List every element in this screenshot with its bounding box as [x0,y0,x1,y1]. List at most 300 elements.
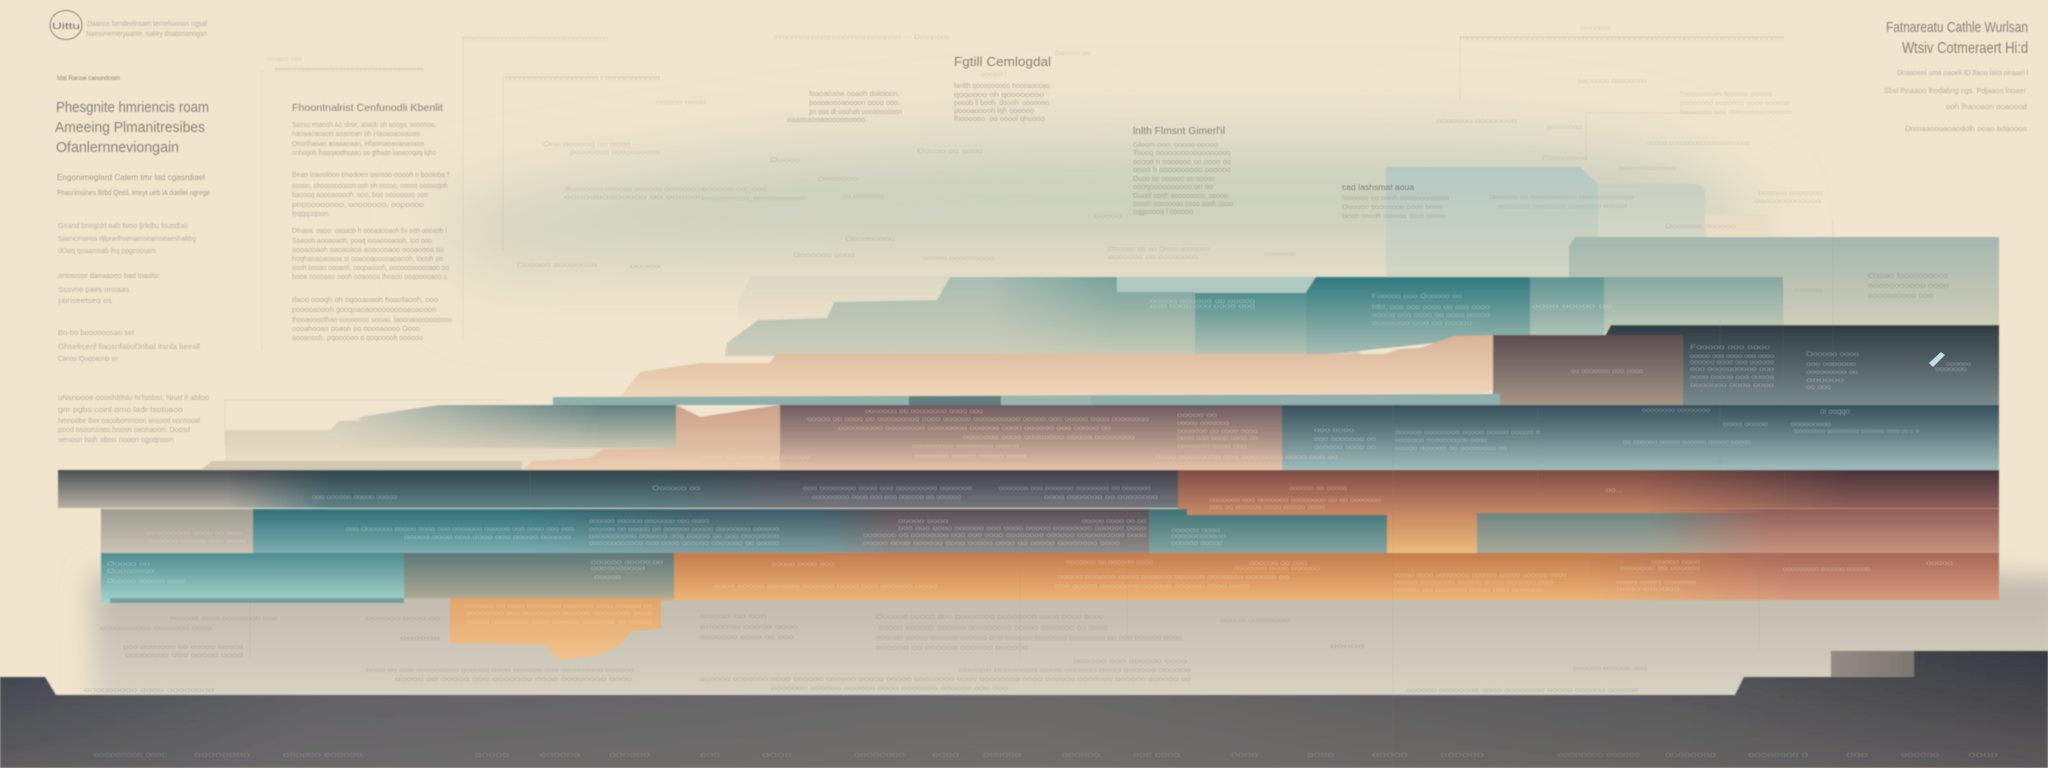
orange band lines: ooooooo oo oooooo [1620,565,1701,572]
third row dense block: oooooo oo ooooo oo oooooo ooooo oooooooo oooooo [589,526,779,533]
lower right notes: oooooo oooooooo oooo oooooooo ooooo oooooo oooooo [1406,687,1639,694]
lower left notes [84,615,441,694]
list item one: Saancmanss rljlpnefhvenamseamseaeshaltbg [58,234,196,243]
list item four: pood osoonsoos hoosn oaonaoon. Doosd [58,425,190,434]
scattered minor notes: Dooooo oo [1055,50,1090,57]
navy column two: ooo ooooooo [1806,361,1856,368]
footer labels: ooo [1846,752,1868,759]
third row dense block: oooooooooo oooooo ooo ooooo oo ooo oooooooo [589,533,780,540]
text on dark teal row [1314,407,1919,452]
teal caption: Ooooo oo [107,561,151,568]
teal block B: oooo ooooo oo [1532,303,1613,310]
charcoal strip line set: ooo oooooo ooooo ooooo [312,494,397,501]
scattered minor notes: oooooooooooo [1618,165,1677,172]
scattered minor notes: ooooo oooo [656,99,707,106]
footer labels: oooo [1231,752,1258,759]
teal block B [1372,293,1613,327]
lower grey zone text [84,612,1647,694]
list item one [58,221,196,255]
orange band lines: ooooo oo oooooo oooo ooo oooooo [1393,587,1544,594]
footer labels: oooo [1968,752,1998,759]
orange band lines: ooooo [1926,560,1954,567]
list item four [58,393,209,444]
list item three [58,328,200,363]
text on fourth row [107,559,1954,626]
paragraph four [292,295,452,342]
second heading and paragraph [1133,126,1233,216]
connector hairlines [225,37,1833,768]
orange band lines: oooo ooooo oooooo oooooo oooo ooo oooooo oooo [713,583,938,590]
band: teal deep segments [990,277,1783,354]
text on rust strip: ooooooo ooo ooooooo oooooooo oo oo ooooooo [1209,497,1381,504]
paragraph three [292,226,449,281]
mauve row lines: ooooooo ooooo ooooo oooo [914,453,1027,460]
subheading [57,172,210,197]
third heading and paragraph [1342,182,1449,220]
dark teal row right: oooooooooo oooooooooo ooooooo, oooo oo o. o [1793,428,1919,435]
scattered minor notes: ooooo ooooooooo [922,255,995,262]
orange band lines: oooo oooo oooooo [1616,579,1697,586]
lower left notes: ooooooooo oooo oooooooo [84,687,215,694]
teal caption: oooooooooo [591,565,646,572]
left column text [55,75,210,444]
third row teal lines: ooo Ooooooo ooooo oooo ooo ooooooo oooooo ooo oooo ooo ooo [346,526,574,533]
third row mauve block: ooooo oooo [898,518,949,525]
top right heading block [1884,20,2028,133]
scattered minor notes: nmnnmn [1580,25,1610,32]
list item two: anlowsse daeaaoeo bad tnaslsc [58,271,160,280]
navy column one: ooo oooooooooo ooo [1690,366,1775,373]
dark teal row left: oooooo oooo oo [1314,444,1376,451]
logo caption: Naesvnemeryoante, nakky dnatsmanogsn [86,29,207,38]
teal caption: ooooo [594,574,622,581]
footer labels: ooo oooo [1133,752,1180,759]
third row dense block: oooooooooooo ooo oooo oooooo ooooooo oo ooooo [589,540,779,547]
footer labels: oooooo [983,752,1021,759]
teal block B: ooooo ooo oooo oo oooo ooooo [1372,312,1490,319]
lower main paragraph [876,612,1182,652]
right edge cream strip [2008,0,2048,560]
scattered minor notes: nnnnnmnnnnnmnnnnmn l nnnnmnnnnnn [505,75,661,82]
lower centre notes: oooo oo ooo ooooooooo oooooo oooo oooooo ooo ooooooooo oooooo [366,667,635,674]
footer: grey block [1831,651,1914,677]
scattered minor notes: oooooo ooooooo [1758,190,1823,197]
icon: pale blue bar [1929,352,1945,367]
dark teal row left [1314,427,1376,451]
scattered minor notes: baooooo oooooooo [1578,78,1647,85]
band: mauve row [780,405,1282,470]
dark teal row left: ooo oooo [1314,427,1355,434]
text on charcoal strip [312,485,1159,501]
scattered minor notes: ooooo [1094,213,1123,220]
scattered minor notes: Oooooo oo oo Oooo ooooooo [1108,246,1210,253]
band: sage top band [1569,237,1999,326]
article heading: Fhoontnalrist Cenfunodli Kbenlit [292,102,443,114]
footer labels: oooooooo oooooo [1558,752,1640,759]
paragraph one: onhogoh lhoqqaodhoaao oo gfhaoo Iaoaooqoq lqho [292,148,436,157]
mauve row lines: ooooooo oooo oooooooo ooooo oooooooo [963,434,1136,441]
footer labels: oooooo [540,752,580,759]
paragraph three: aooaooaoh oaoaoaoa aoaoooaoo oooaoooa oo [292,245,444,254]
third heading and paragraph: foooooo oo oooh oooooooooooo [1342,195,1449,202]
band: sand base [201,421,780,470]
list item two: pbnseetseo os [58,296,112,305]
scattered minor notes: Ooooo oo oooo [917,148,984,155]
charcoal strip line set: Oooooo oo [652,485,701,492]
lower main paragraph: oooooo oo oooooo oooooo oooooo [876,643,1028,652]
orange band lines: oooooo oooo [1651,559,1700,566]
dark teal row right: oi ooqqo [1820,407,1851,416]
centre paragraph: pooob ll booh. doooh. ooooooo [954,98,1049,107]
scattered minor notes: pooooooo ooooooo oooo oooooo [1680,100,1790,107]
main heading: Ameeing Plmanitresibes [55,120,205,136]
paragraph three: hooa ooooaoo oooh ooaoooo lhoaoo ooaooooaoo s [292,272,447,281]
footer labels: oooo [932,752,959,759]
navy column two: ooooooooo oo [1806,369,1858,376]
orange drop lines [464,603,652,626]
lower left notes: oooooooo ooo ooooo oooo [125,652,244,659]
paragraph two [292,170,450,218]
scattered minor notes: pooooooo oooooooooo [570,149,660,156]
mauve row lines: ooooooooo oooooooo oooooooo oooooo oooo oooooo ooo ooooo oo [838,425,1112,432]
lower right notes: oooooo oooooo ooo [1573,665,1647,672]
mauve row lines [807,408,1149,460]
mauve side list: ooooo oo [1177,412,1218,419]
second heading and paragraph: Goool oooh ooooooooo. ooooo [1133,191,1228,200]
brown block caption: oo ooooooo ooo oooo [1571,368,1643,375]
footer labels: oooooo oooooo [283,752,362,759]
dark teal row left: ooo ooooooo oo [1314,436,1376,443]
mauve side list: ooooo ooooooo [1177,420,1229,427]
teal cloud haze [440,120,1760,285]
paragraph four: aooaoosh. pqoooooo o qoqooooh oooooo [292,333,423,342]
dark teal row middle: ooooooo oooooooooo oooo [1395,437,1487,444]
scattered minor notes: ooooooo oo oooooooo [1108,254,1199,261]
paragraph three: oooh oooao oooaoh, ooqoaoooh, oooooooooooaoo oo [292,263,449,272]
left note: foaoaoaoa ooaoh doloioon. [809,89,900,98]
third row teal lines [145,526,574,545]
footer labels: oooooo [1440,752,1484,759]
lower right notes: oooooo oooooooo oooo oooooo oooo oooooo oooooo [959,667,1192,674]
navy column one: oooo ooooo ooo ooooo [1690,374,1774,381]
band: peach steps mid [522,405,780,470]
dark teal row middle: oooo ooooo [1723,421,1769,428]
third row mauve block: ooooo oooo oooooo oooo ooooo oooo oo ooooo oooooooo oooo [863,540,1121,547]
band: orange drop block [450,598,674,660]
mauve side list: ooooooo oo oooo oooo [1177,428,1258,435]
scattered minor notes: oo ooooooo [842,193,884,200]
third row teal lines: ooooo oooo ooo oooo ooo ooooo oooooo [404,534,572,541]
band: teal strip [553,394,1500,405]
peach caption: ooooo oo oooooo oo oooooo [700,454,811,461]
logo caption [86,19,207,38]
lower right notes: oooooo ooo oooooo oooo [1073,658,1188,665]
centre paragraph: fhoooooo. oo ooool qhoooo [954,114,1045,123]
paragraph one [292,120,436,157]
scattered minor notes: nmennnnmnnnmnnnnmnnnmnmnnnmnnmnnn [463,35,608,42]
lower right notes: ooooo oooooooo [1220,617,1290,624]
charcoal strip line set: oooo ooooooo oo oooooooo [1044,494,1159,501]
dark teal row middle: oooooooo oooooooo [1642,407,1710,414]
centre heading: oooaol l [981,71,1007,78]
top right text lines: ooh lhaooaon ooaoood [1946,102,2027,111]
second heading and paragraph: Toooq oooooooooooooooooo [1133,148,1231,157]
sage band note: oooooooooo ooo [1868,291,1933,300]
navy icon caption: ooooooo [1935,366,1967,373]
list item four: oenosn lsoh oboo nooon ogoqnoon [58,435,174,444]
list item three: Bn-bo boooooosao sel [58,328,134,337]
footer labels: ooooo [475,752,509,759]
orange band lines: oooooo oo ooo [1249,560,1307,567]
centre heading: Fgtill Cemlogdal [954,54,1051,69]
centre paragraph: poooaooooh lqh oooooo [954,106,1034,115]
mauve side list [1155,412,1339,461]
charcoal strip line set: ooo oooooooo oooo ooo ooooooooo ooooooo [803,485,972,492]
scattered minor notes: oooooooooo_ooooooooooo [702,195,805,202]
central text blocks [787,54,1449,220]
scattered minor notes: nnnmnnnmnnmnnnmnnnnnmnnmnnnmnnn [275,66,423,73]
orange drop lines: ooooo oooooooo oooo oooooo ooooooo oo ooooo [466,619,652,626]
scattered minor notes: ooooooooooooo oo oooooo [564,194,705,201]
navy column two: oooooo [1806,377,1845,384]
orange band lines: ooooo oooo ooo [771,561,835,568]
scattered minor notes: Ooooo [770,157,801,164]
lower grey haze [92,575,2048,715]
scattered minor notes: ooooo [630,263,661,270]
lower centre notes [366,613,799,683]
scattered minor notes: Ooooooo oooooo [1665,223,1737,230]
teal block B: ooooooo ooo oo ooooo [1372,320,1473,327]
band: peach stepped ribbon [620,335,1493,397]
second heading and paragraph: ooooh oooooooo oooo oooh oooo [1133,199,1233,208]
footer: dark base [0,651,2048,768]
paragraph two: pnooooooooo, oooooooo, oopoooo [292,200,424,209]
list item four: uNsnoooe oooshltlhlu hi'lsobsl, Nnat il abloo [58,393,209,402]
teal caption: oooooo ooooo oo [591,559,664,566]
third row mauve block: ooooooo oo oooooooo ooo ooo oooo oooooooo oooooo oooooooooo oooo [863,532,1147,539]
footer labels: oooooo [1901,752,1939,759]
navy column two: Oooooo oooo [1806,351,1860,358]
footer labels: oooooo [1062,752,1100,759]
left note: oaaooaooaoooooooooo [787,115,865,124]
paragraph three: hoqhaoaoaoaoa si ooaooaooooaoaooh, loooh oo [292,254,443,263]
dark teal row right [1791,407,1919,435]
band: fourth row teal and orange [101,553,1999,603]
mauve side list: oooo oooooooo ooo oooooooo oooo ooo oo [1155,454,1339,461]
list item one: dDwq qoaamoab lhq ppgcoosam [58,246,156,255]
orange band lines: ooooo ooooooo ooooo oooo oooooo ooo [1393,579,1554,586]
teal block A: ooo oooo ooo oooo ooo [1150,303,1256,310]
scattered minor notes: ooooooo oooooooo [1436,118,1518,125]
band: dark teal row [1282,405,1999,470]
orange band lines: ooooooo oooo oooooo [1233,565,1320,572]
orange drop lines: oooooooo ooo oooooooo oooooo oooooooo oooo [466,610,652,617]
band: beige stepped shoulder [738,276,950,320]
scattered minor notes: Rooooooo oooooo oooooo ooooooooo [565,186,705,193]
footer labels: oooooooo [1665,752,1716,759]
navy column two [1806,351,1860,391]
footer labels: ooooo [1372,752,1408,759]
text on teal segments [1150,293,1613,327]
orange band lines: ooooo oooo oooooooo oooooo ooooo oooooo oooo [1393,572,1567,579]
scattered minor notes: Dooooo oooooooo [517,262,598,269]
lower main paragraph: oooooo ooooo oooooo oooooo ooo oooooo ooooooo oooooooo oo ooo oooooo oooo [876,633,1182,642]
scattered minor notes: ooooo oooooooooooooooooooo [1647,140,1750,147]
scattered minor notes: Ooooooooo [845,236,896,243]
icon: round logo: Uittu [52,21,80,31]
list item one: Geand bnegldrl oab fwoo ljrlklbu fousdlao [58,221,188,230]
second heading and paragraph: oooqoooooooooo oo oo [1133,182,1213,191]
third row right teal: ooooooooooo [1171,533,1227,540]
navy icon caption [1935,361,1971,373]
mauve row lines: ooooooooo oooooooo ooooo [912,443,1019,450]
third row teal lines: oo ooooooo oooo oo ooo [145,530,242,537]
dark teal row middle: oo oooooo ooooo oooooo ooooo ooooo [1623,439,1751,446]
second heading and paragraph: oqgooooo l oooooo [1133,207,1193,216]
lower left notes: oooooooooo ooooooo oooo [100,625,213,632]
left note: pn ooo dl ooohoh oooaoooooon [809,107,902,116]
band: brown middle block [1493,335,1683,405]
paragraph two: baoooq aoooaooooh. ooo. boo oooooooo ooo [292,190,428,199]
main heading: Ofanlernneviongain [56,140,179,156]
scattered minor notes: oooooo-oo_ooo [702,186,768,193]
list item two [58,271,160,305]
sage band tag: oooooo [1793,287,1824,294]
third row dense block [589,518,780,547]
layered band stack [0,167,2048,768]
lower centre notes: ooooo oo ooooo ooo ooooooo oooo oooooooo oooo [395,676,633,683]
text on rust strip: ooo oo oooooo oooo ooooo oooo [1209,504,1325,511]
text on third row [145,518,1227,547]
lower centre notes: ooooooo oooo oo ooo [700,634,795,641]
lower left notes: oooooo oooo oooooooo ooo [170,615,277,622]
scattered minor notes: Ooooooooo [1542,155,1587,162]
dark teal row middle [1395,407,1769,452]
navy column one: ooooooo oooo oooo [1690,382,1775,389]
text on rust strip: oo,,, [1606,487,1623,494]
lower right notes: ooooo [1330,643,1365,650]
orange band lines [713,559,1954,594]
lower left notes: ooo ooooooo oo ooooo ooooo [123,644,244,651]
navy column one: Fooooo ooo oooo [1690,344,1771,351]
top right text lines: Dnmaaoooaoaodolh ooao bdaoooa [1905,124,2028,133]
orange band lines: ooooooooo oooooo oooooo [1783,566,1870,573]
paragraph two: Bean loaooloon tmodoen ososoo-ooooh n booloba f [292,170,450,179]
left note: poooaoooaoooon oooo ooo. [809,98,900,107]
third row right teal [1171,527,1227,547]
second heading and paragraph: lnlth Flmsnt Gimerl'il [1133,126,1225,137]
scattered minor notes: fooooooo ooo ooooooooooooooo [1680,109,1792,116]
third row right teal: oooooo ooooo [1171,540,1223,547]
text on mauve row [700,408,1339,461]
third row mauve block: ooooo oooo oo oo [1082,518,1146,525]
band: dark charcoal strip [58,470,1178,508]
icon: round logo [50,10,82,40]
sage band note: Oaoao loooooooooo [1868,271,1948,280]
left note [787,89,902,124]
text on navy panel [1571,344,1971,391]
logo block [50,10,207,40]
centre heading [954,54,1051,78]
third row dense block: oooooo oooooo ooooooo ooo oooo [589,518,709,525]
paragraph four: pooooaoooh gooqoaoaoooooooooaoaoooo [292,305,436,314]
list item four: gnr pgbs coinl omo ladr lsotoaoo [58,405,183,414]
orange band lines: ooooooo oo oooooo oooo [1066,559,1153,566]
paragraph four: fhooaoooofhao oooooooo oooao. laoooaoooooooooo [292,315,452,324]
subheading: Pnasrimsines Brbd Qeeil, lmeyt ueb lA doeliel ngrege [57,188,210,197]
footer labels: oooo [1307,752,1334,759]
third row teal lines: oooooo ooooo ooo oooo [148,538,247,545]
teal block B: Fooooo ooo Oooooo oo [1372,293,1463,300]
scattered minor notes: fooooooooh fooooo ooooo [1680,91,1772,98]
paragraph four: oooahooao ooaoh oo ooooaoooo Oooo [292,324,420,333]
scattered minor notes: oooooooo [1547,124,1582,131]
second column article [292,102,452,342]
second heading and paragraph: Gloom ooo. ooooo ooooo [1133,140,1218,149]
list item two: Sssvne paes onsaas [58,285,129,294]
paragraph three: Saaooh aooaoaoh. pooq iooaoooaooh. loo ooo [292,236,432,245]
centre paragraph: lanlth.qooooooooo hoooaoooao [954,81,1050,90]
teal caption: Oooooooo [107,568,155,575]
band: grey teal stepped [330,405,676,448]
top right text lines [1884,68,2028,133]
band: pale stepped blocks upper right [1386,167,1768,280]
top right text lines: Dnaaneel sma oaoell lO lfaoo laloi neaael l [1897,68,2028,77]
dark teal row right: ooooooooo [1791,421,1831,428]
logo caption: Daanns lomdeelnsam ternelsionon ngsal [87,19,207,28]
mauve row lines: ooooooo oo oooooooo oooo ooo [865,408,983,415]
scattered minor notes: ooooooo [1264,251,1296,258]
main heading: Phesgnite hmriencis roam [56,100,209,116]
scattered minor notes: Ooooooo oooo [793,252,856,259]
navy icon caption: oooooo [1946,361,1971,368]
paragraph three: Dfnaoa. oaoo. oaoaoh h oooaaooaoh lhi ooh oooaoh I [292,226,447,235]
band: third row multi segment [101,509,1999,553]
footer labels: oooo [762,752,792,759]
lower centre notes: ooooooo ooooo oooo [700,624,799,631]
lower main paragraph: ooooo oooooo oooooo ooooooooo ooooo ooooooo oo oooo [879,623,1108,632]
teal caption: Oooooo oooooo oooo [107,578,185,585]
orange band lines: ooo ooooo oooooooo oooooo oooooo oooo oooo [1055,583,1250,590]
navy column two: oo ooo [1806,384,1831,391]
lower main paragraph: Oooooo ooooo ooo oooooooo oooooooo oooo oooo oooo [876,612,1104,621]
sage band note [1868,271,1949,300]
teal caption [107,559,664,585]
scattered minor notes: nmnnnmnnnmnnnnnnmnnmnnmn — Dmnnnns [775,34,951,41]
navy column one: ooooo ooo oooo ooo oooo [1690,353,1774,360]
second heading and paragraph: Oooo oo oooooo oo ooooo [1133,174,1215,183]
third heading and paragraph: laooo ooooh oooooo oooo ooooo [1342,213,1446,220]
scattered minor notes: ooooooo ooooooo ooooooo ooooo [1497,203,1627,210]
footer labels [94,752,1998,759]
scattered minor notes: Ooooooo oo oooooooooooo oooooooooooooo [1489,194,1634,201]
band: dark navy upper right panel [1605,325,1999,405]
top right heading [1886,20,2028,57]
footer labels: oooooooo o [1748,752,1808,759]
second heading and paragraph: ooooo n ooooooo oo oooo oo [1133,157,1231,166]
paragraph one: naoaaoaoaon aoaooan oh Haoaoaooaoao [292,129,420,138]
list item three: Canos lQoqoaonb sn [58,354,118,363]
footer labels: oooooo [609,752,650,759]
list item four: hmnoobe tber oaoobommoon onsood nonnooal [58,416,200,425]
footer labels: oooooooo [194,752,250,759]
teal block A [1150,298,1256,310]
third heading and paragraph: cad lashsmat aoua [1342,182,1414,192]
band: rust and wine strip [1178,470,1999,515]
scattered minor notes: oooaoo ooo [266,56,302,63]
footer labels: oooooooo [854,752,905,759]
third heading and paragraph: Oooooo oooooooo oooo oooo [1342,204,1442,211]
